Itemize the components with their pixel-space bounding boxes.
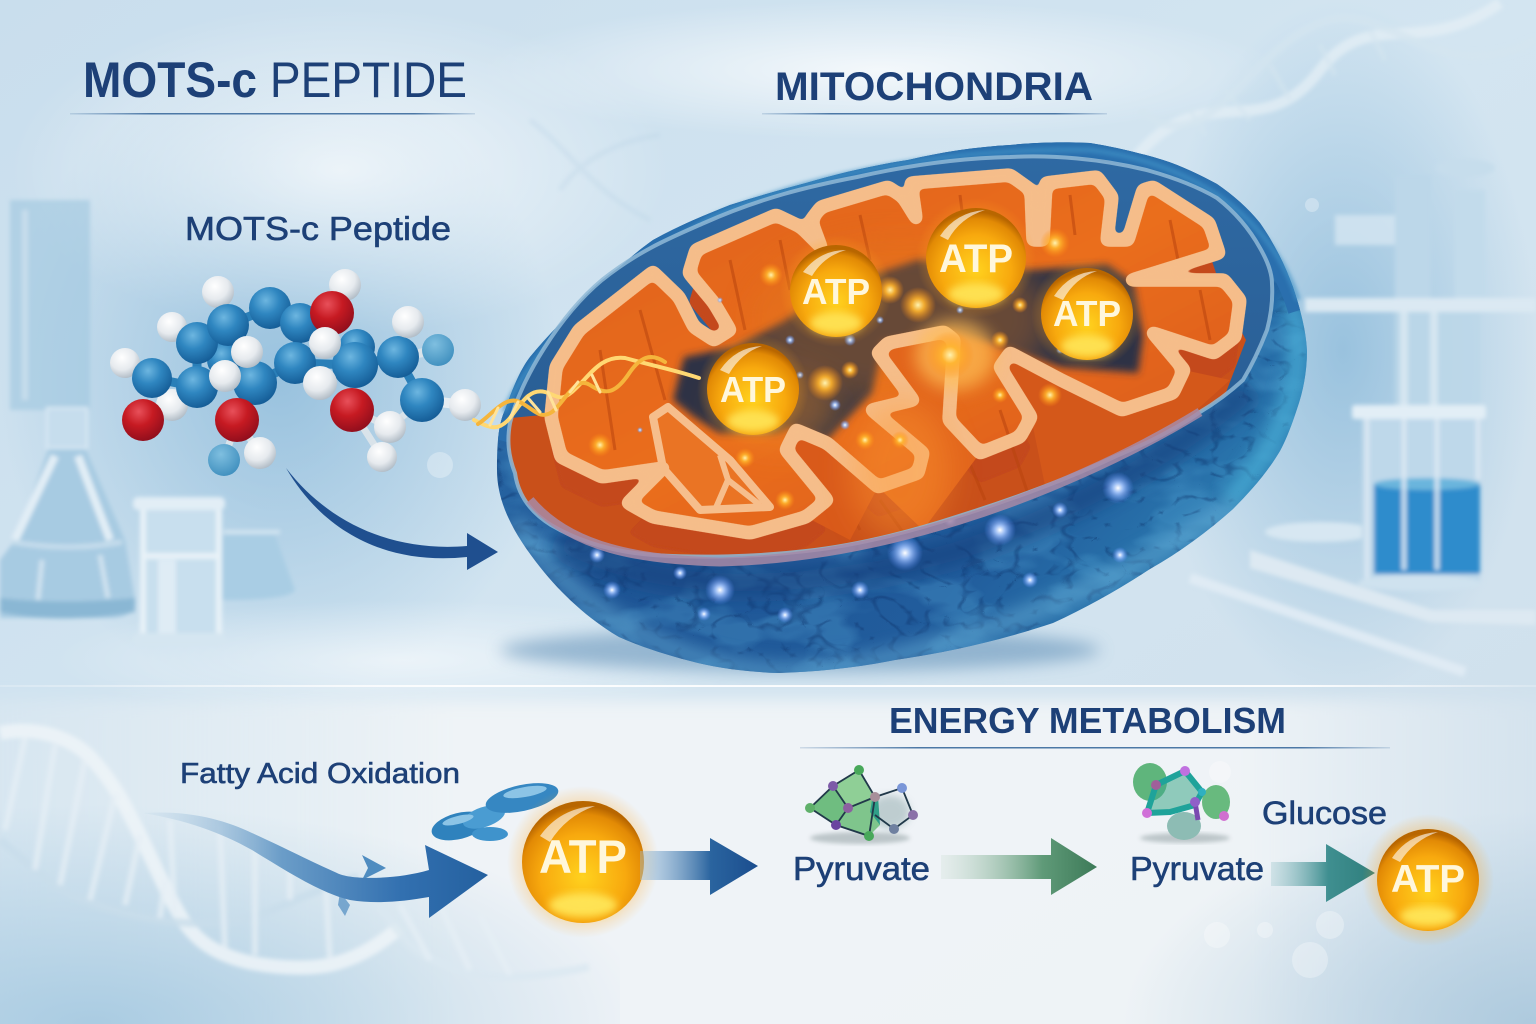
arrow: pyruvate to pyruvate bbox=[941, 838, 1097, 895]
label: Glucose: Glucose bbox=[1262, 795, 1387, 831]
ATP orb: upper left bbox=[780, 235, 892, 347]
ATP orb: upper left: ATP bbox=[802, 271, 870, 312]
arrow: peptide to mitochondrion bbox=[286, 468, 498, 570]
outer membrane bbox=[497, 142, 1307, 673]
matrix glow bbox=[750, 240, 1050, 400]
faint DNA: behind mitochondrion bbox=[530, 120, 660, 220]
ATP orb: upper middle bbox=[916, 198, 1036, 318]
faint lab glassware: left bbox=[0, 200, 295, 646]
helix: peptide into mitochondrion bbox=[474, 357, 699, 427]
bokeh lights bbox=[427, 198, 1344, 978]
ATP orb: lower left: ATP bbox=[720, 369, 786, 410]
icon: fatty acid molecules bbox=[429, 778, 561, 845]
label: Fatty Acid Oxidation: Fatty Acid Oxidation bbox=[180, 758, 460, 790]
arrow: ATP to pyruvate bbox=[640, 838, 758, 895]
faint DNA: bottom left bbox=[0, 731, 589, 977]
arrow: pyruvate to ATP bbox=[1271, 844, 1375, 902]
ATP orb: large bottom: ATP bbox=[539, 830, 627, 883]
lobe bbox=[653, 407, 770, 510]
shadow bbox=[500, 628, 1100, 672]
icon: pyruvate molecule 2 bbox=[1133, 763, 1230, 843]
ATP orb: lower left bbox=[697, 333, 809, 445]
arrow: fatty acid swoosh bbox=[143, 812, 488, 918]
ATP orb: upper middle: ATP bbox=[939, 237, 1013, 281]
ATP orb: upper right: ATP bbox=[1053, 293, 1121, 334]
atoms: rear bbox=[110, 269, 454, 476]
ATP orb: large bottom bbox=[507, 786, 659, 938]
finger glow bbox=[915, 320, 995, 390]
atoms: oxygen bbox=[122, 291, 374, 442]
title: MOTS-c PEPTIDE: MOTS-c PEPTIDE bbox=[83, 52, 467, 108]
label: MOTS-c Peptide: MOTS-c Peptide bbox=[185, 210, 451, 247]
membrane light points bbox=[589, 472, 1134, 623]
ATP orb: upper right bbox=[1031, 258, 1143, 370]
atoms: hydrogen bbox=[209, 306, 481, 472]
lower mauve rim bbox=[530, 412, 1200, 562]
molecule: MOTS-c peptide bbox=[110, 269, 481, 476]
membrane texture bbox=[490, 130, 1320, 680]
dark matrix bbox=[673, 260, 1143, 440]
mitochondrion bbox=[490, 130, 1320, 680]
cristae fill bbox=[551, 175, 1240, 533]
wall streaks bbox=[600, 195, 1210, 535]
ATP orb: bottom right bbox=[1362, 814, 1494, 946]
inner rim edge bbox=[508, 156, 1272, 557]
label: Pyruvate 1: Pyruvate bbox=[793, 850, 930, 887]
heading: ENERGY METABOLISM: ENERGY METABOLISM bbox=[889, 700, 1286, 741]
faint lab glassware: right bbox=[1190, 159, 1536, 672]
faint DNA: top right bbox=[1130, 3, 1536, 165]
atoms: carbon bbox=[132, 287, 444, 422]
inner basin bbox=[508, 158, 1270, 556]
outer rim highlight bbox=[504, 150, 1298, 412]
cristae membrane strip bbox=[551, 175, 1240, 533]
fingers rising from below bbox=[884, 342, 976, 526]
matrix sparks bbox=[588, 228, 1070, 510]
label: Pyruvate 2: Pyruvate bbox=[1130, 850, 1264, 887]
title: MITOCHONDRIA: MITOCHONDRIA bbox=[775, 65, 1093, 109]
icon: pyruvate molecule 1 bbox=[805, 765, 918, 844]
ATP orb: bottom right: ATP bbox=[1391, 858, 1465, 901]
